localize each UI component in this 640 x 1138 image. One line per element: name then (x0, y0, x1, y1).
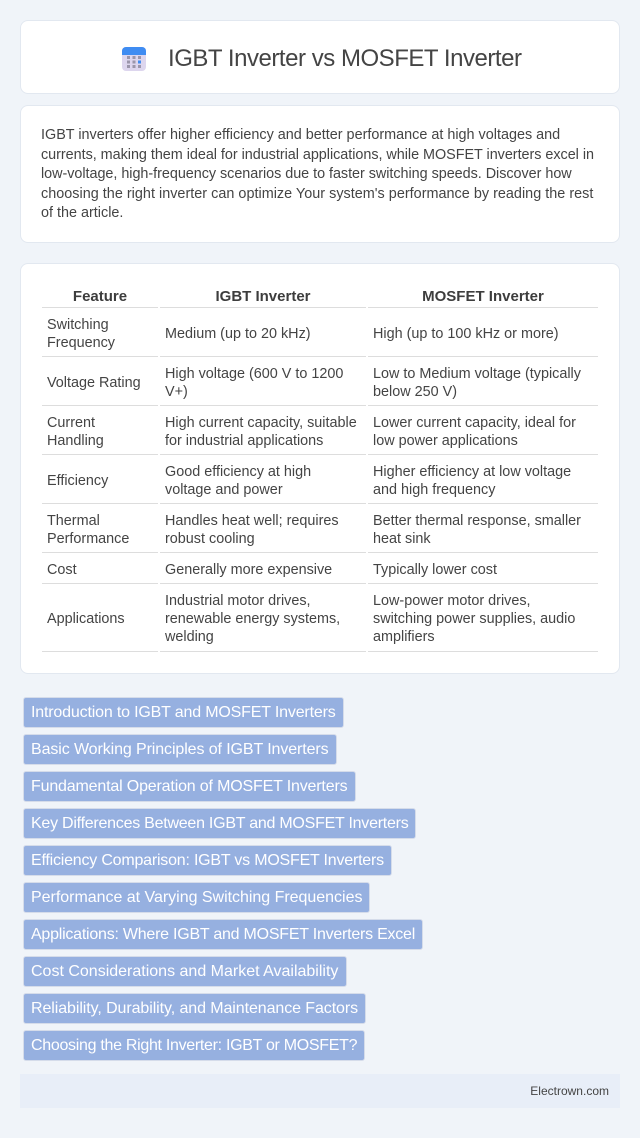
row: current handling: for industrial applications (165, 433, 323, 449)
link: key differences (23, 808, 416, 839)
title: IGBT Inverter vs MOSFET Inverter (168, 45, 522, 72)
link: applications (23, 919, 423, 950)
link: efficiency comparison (23, 845, 392, 876)
row: switching frequency: Frequency (47, 335, 115, 351)
comparison table panel (20, 263, 620, 674)
link: choosing (23, 1030, 365, 1061)
link: choosing: Choosing the Right Inverter: IGBT or MOSFET? (31, 1037, 357, 1054)
row: voltage rating: V+) (165, 384, 188, 400)
row: efficiency: and high frequency (373, 482, 495, 498)
footer credit: Electrown.com (530, 1084, 609, 1098)
row: switching frequency: Switching (47, 317, 109, 333)
row: cost: Cost (47, 562, 77, 578)
link: cost considerations (23, 956, 347, 987)
table header: IGBT Inverter (215, 288, 311, 305)
link: reliability (23, 993, 366, 1024)
footer (20, 1074, 620, 1108)
intro card (20, 105, 620, 243)
row: applications: amplifiers (373, 629, 435, 645)
table header: Feature (73, 288, 127, 305)
row: efficiency: voltage and power (165, 482, 283, 498)
row: cost: Typically lower cost (373, 562, 497, 578)
link: introduction (23, 697, 344, 728)
row: switching frequency (47, 317, 559, 351)
row: thermal performance: heat sink (373, 531, 431, 547)
row: efficiency (47, 464, 571, 498)
intro text: of the article. (41, 205, 123, 221)
row: switching frequency: Medium (up to 20 kHz) (165, 326, 311, 342)
row: thermal performance: Performance (47, 531, 129, 547)
link: fundamental operation: Fundamental Operation of MOSFET Inverters (31, 778, 347, 795)
row: switching frequency: High (up to 100 kHz or more) (373, 326, 559, 342)
row: cost (47, 562, 497, 578)
link: key differences: Key Differences Between IGBT and MOSFET Inverters (31, 815, 408, 832)
intro text: currents, making them ideal for industrial applications, while MOSFET inverters excel in (41, 146, 594, 162)
row: thermal performance (47, 513, 581, 547)
row: voltage rating: Voltage Rating (47, 375, 141, 391)
row: voltage rating: High voltage (600 V to 1200 (165, 366, 343, 382)
link: fundamental operation (23, 771, 356, 802)
link: performance: Performance at Varying Switching Frequencies (31, 889, 362, 906)
row: current handling (47, 415, 576, 449)
row: efficiency: Efficiency (47, 473, 108, 489)
row: applications: renewable energy systems, (165, 611, 340, 627)
row: current handling: Handling (47, 433, 104, 449)
header card (20, 20, 620, 94)
intro text: IGBT inverters offer higher efficiency and better performance at high voltages and (41, 127, 560, 143)
intro text (41, 127, 594, 221)
row: current handling: Current (47, 415, 95, 431)
row: thermal performance: Handles heat well; requires (165, 513, 339, 529)
link: performance (23, 882, 370, 913)
table header (73, 288, 544, 305)
row: applications: welding (165, 629, 214, 645)
intro text: low-voltage, high-frequency scenarios due to faster switching speeds. Discover how (41, 166, 572, 182)
row: current handling: Lower current capacity, ideal for (373, 415, 576, 431)
link: reliability: Reliability, Durability, and Maintenance Factors (31, 1000, 358, 1017)
row: thermal performance: robust cooling (165, 531, 255, 547)
table of contents (23, 697, 423, 1061)
link: applications: Applications: Where IGBT and MOSFET Inverters Excel (31, 926, 415, 943)
row: efficiency: Good efficiency at high (165, 464, 311, 480)
icon: calendar grid (122, 47, 146, 71)
row: applications: Applications (47, 611, 125, 627)
link: basic working principles (23, 734, 337, 765)
row: current handling: low power applications (373, 433, 518, 449)
row: applications: Industrial motor drives, (165, 593, 311, 609)
intro text: choosing the right inverter can optimize Your system's performance by reading the rest (41, 186, 593, 202)
row: applications (47, 593, 575, 645)
row: current handling: High current capacity, suitable (165, 415, 357, 431)
row: efficiency: Higher efficiency at low voltage (373, 464, 571, 480)
link: efficiency comparison: Efficiency Comparison: IGBT vs MOSFET Inverters (31, 852, 384, 869)
link: introduction: Introduction to IGBT and MOSFET Inverters (31, 704, 336, 721)
row: thermal performance: Better thermal response, smaller (373, 513, 581, 529)
table header: MOSFET Inverter (422, 288, 544, 305)
row: applications: switching power supplies, audio (373, 611, 575, 627)
row: applications: Low-power motor drives, (373, 593, 531, 609)
link: basic working principles: Basic Working Principles of IGBT Inverters (31, 741, 329, 758)
row: thermal performance: Thermal (47, 513, 100, 529)
link: cost considerations: Cost Considerations and Market Availability (31, 963, 338, 980)
row: voltage rating: below 250 V) (373, 384, 457, 400)
row: cost: Generally more expensive (165, 562, 332, 578)
row: voltage rating (47, 366, 581, 400)
row: voltage rating: Low to Medium voltage (typically (373, 366, 581, 382)
